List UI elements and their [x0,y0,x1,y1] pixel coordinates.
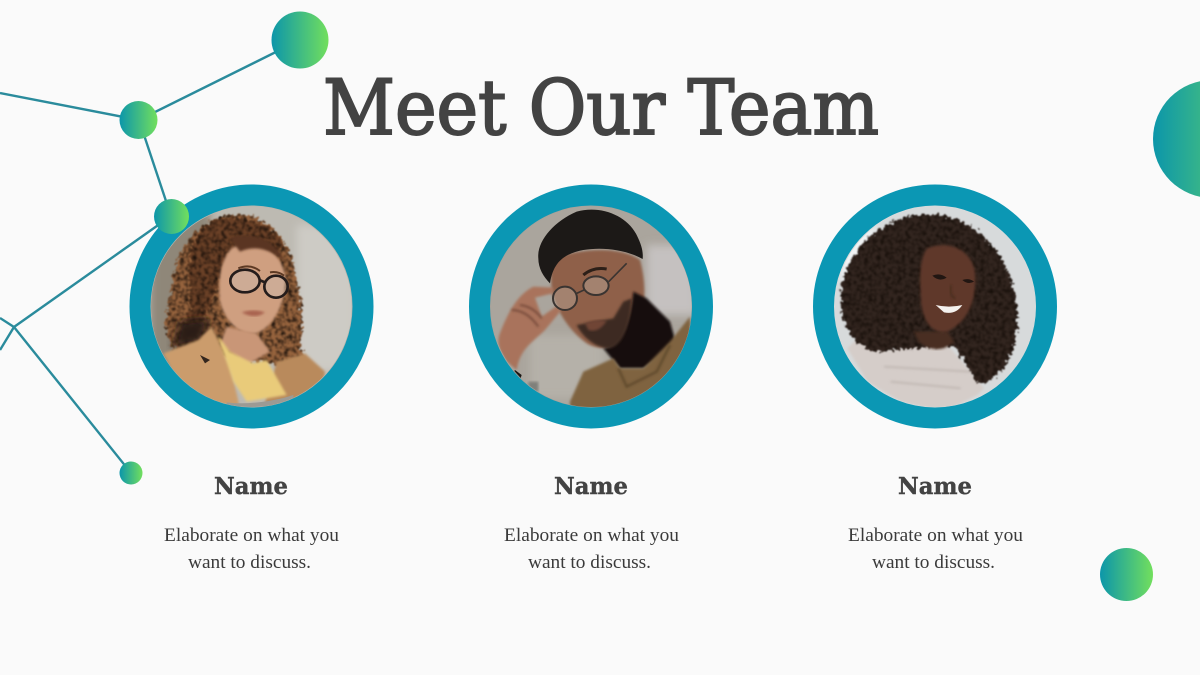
description 2: want to discuss. [528,552,651,573]
description 3: Elaborate on what you [848,525,1023,546]
description 3: want to discuss. [872,552,995,573]
name 1: Name [214,473,288,500]
panel: team member 1 [140,195,363,573]
decorative gradient nodes [120,12,1200,601]
photo ring 2 [480,195,702,418]
portrait: smiling woman with voluminous curly hair [838,212,1036,407]
portrait: woman with curly hair and glasses [151,212,352,407]
title: Meet Our Team [323,63,879,152]
photo ring 3 [824,195,1046,418]
network connector lines [0,40,300,473]
panel: team member 2 [480,195,702,573]
description 2: Elaborate on what you [504,525,679,546]
name 2: Name [554,473,628,500]
portrait: man with black beanie and round glasses [497,210,692,407]
panel: team member 3 [824,195,1046,573]
photo ring 1 [140,195,363,418]
description 1: want to discuss. [188,552,311,573]
name 3: Name [898,473,972,500]
description 1: Elaborate on what you [164,525,339,546]
